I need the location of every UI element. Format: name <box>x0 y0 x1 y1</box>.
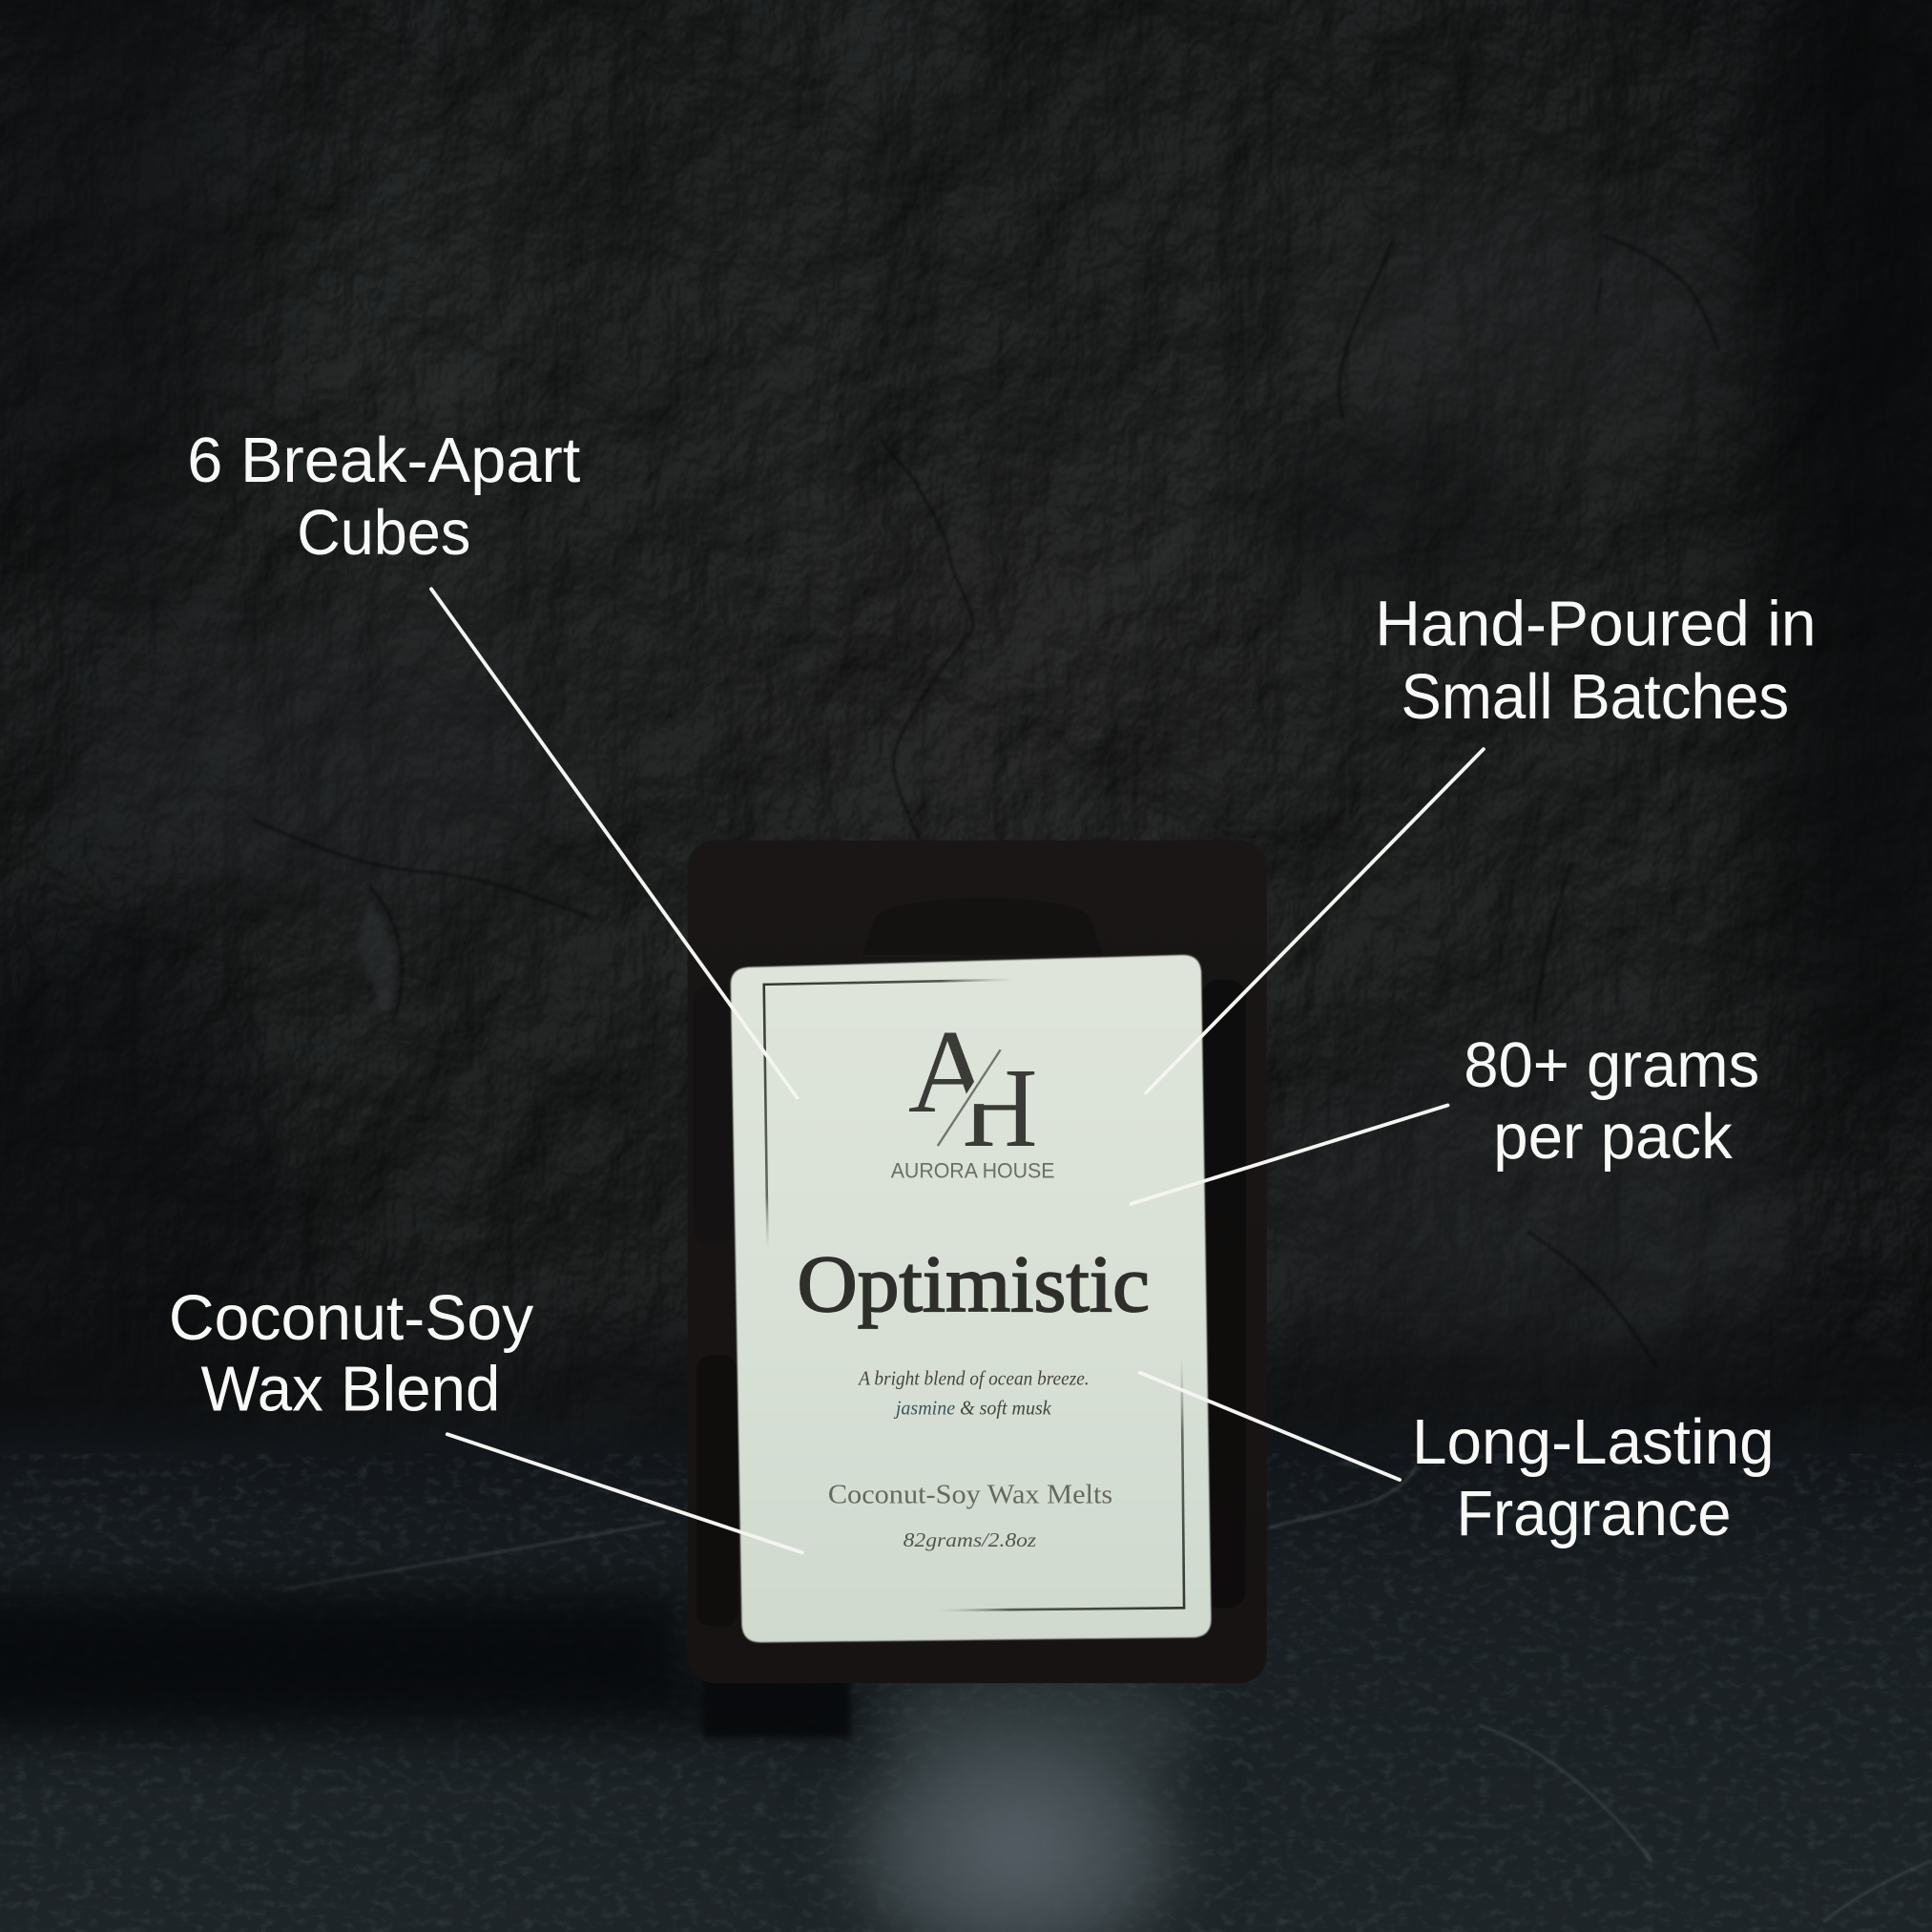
product: wax melt pack <box>688 841 1267 1683</box>
clamshell pack <box>688 841 1267 1683</box>
callout: Hand-Poured in Small Batches: Hand-Poured in <box>1375 589 1817 660</box>
label frame <box>764 980 1184 1610</box>
callout: 80+ grams per pack <box>1132 1029 1759 1204</box>
brand logo: H <box>963 1045 1037 1171</box>
label card <box>731 955 1211 1643</box>
callout: Long-Lasting Fragrance <box>1140 1373 1775 1549</box>
product name: Optimistic <box>798 1239 1150 1329</box>
callout: 6 Break-Apart Cubes: 6 Break-Apart <box>187 425 581 496</box>
brand logo: A <box>908 1006 994 1138</box>
callout: Hand-Poured in Small Batches <box>1146 589 1817 1093</box>
product type: Coconut-Soy Wax Melts <box>828 1481 1112 1510</box>
callout: 80+ grams per pack: per pack <box>1493 1101 1733 1173</box>
callout: Coconut-Soy Wax Blend: Wax Blend <box>201 1354 500 1425</box>
scent description <box>857 1369 1090 1420</box>
floor reflection <box>813 1663 1220 1932</box>
callout: 6 Break-Apart Cubes <box>187 425 798 1098</box>
cast shadow <box>0 1589 850 1737</box>
scent description: A bright blend of ocean breeze. <box>857 1369 1090 1390</box>
callout: Coconut-Soy Wax Blend: Coconut-Soy <box>169 1282 534 1354</box>
callout: Coconut-Soy Wax Blend <box>169 1282 802 1552</box>
callout: Long-Lasting Fragrance: Long-Lasting <box>1412 1406 1775 1478</box>
brand logo: AURORA HOUSE <box>891 1159 1054 1183</box>
callout: 80+ grams per pack: 80+ grams <box>1464 1029 1759 1101</box>
callout: 6 Break-Apart Cubes: Cubes <box>297 497 470 569</box>
background floor <box>0 1404 1932 1932</box>
weight: 82grams/2.8oz <box>904 1530 1036 1551</box>
scent description: jasmine & soft musk <box>893 1399 1051 1420</box>
callout: Long-Lasting Fragrance: Fragrance <box>1456 1478 1731 1549</box>
callout: Hand-Poured in Small Batches: Small Batches <box>1401 661 1789 733</box>
brand logo <box>891 1032 1054 1177</box>
